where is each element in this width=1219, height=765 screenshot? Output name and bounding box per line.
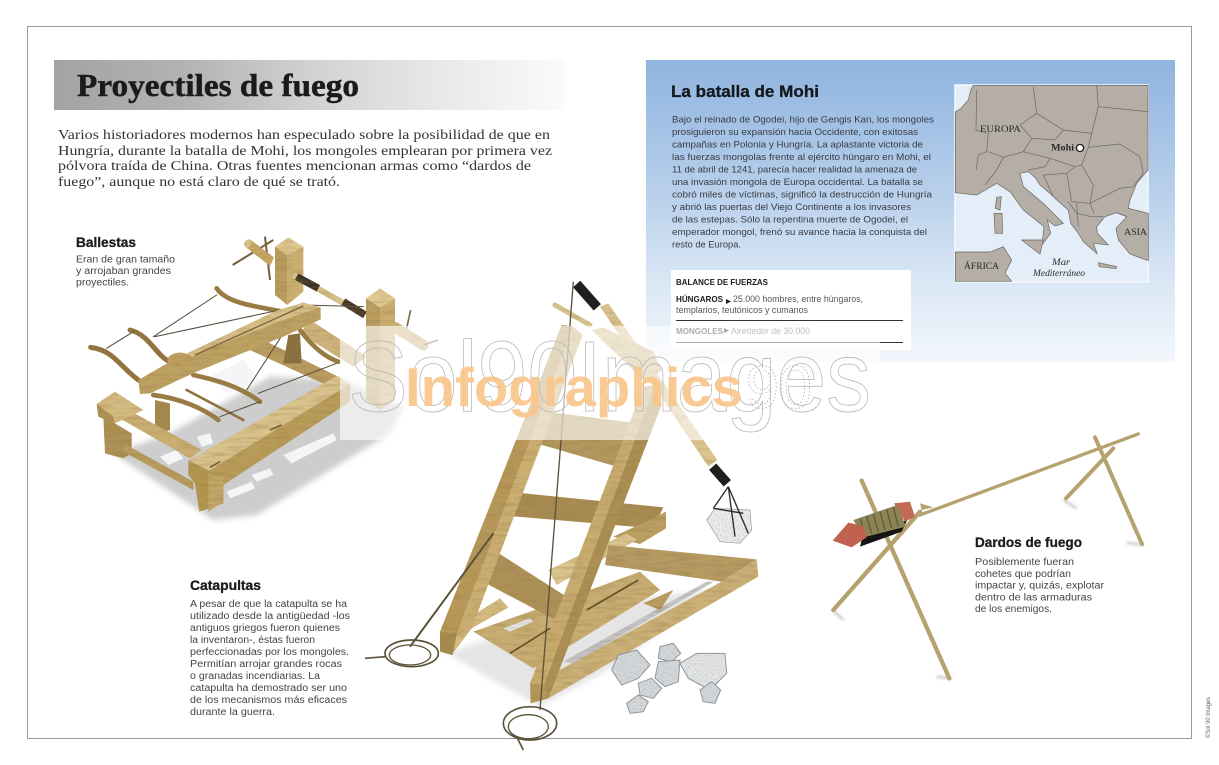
- text: Catapultas: durante la guerra.: [190, 707, 275, 718]
- balance de fuerzas box: MONGOLES: [676, 326, 723, 336]
- windlass axle: [293, 275, 365, 315]
- lower crossbeam: [477, 547, 572, 623]
- label: Mohi marker: Mohi: [1051, 144, 1074, 154]
- right base beam: [535, 545, 758, 698]
- ballista stock: [138, 303, 321, 394]
- right leg: [530, 385, 662, 703]
- platform slats: [473, 572, 673, 668]
- heading: Catapultas: Catapultas: [190, 577, 261, 593]
- label: Mohi marker: [1051, 144, 1084, 154]
- left leg: [440, 325, 583, 655]
- credit: ©Sol 90 Images: [1204, 696, 1212, 738]
- illustration: catapult: [365, 282, 758, 750]
- far beam: [510, 493, 666, 585]
- balance de fuerzas box: HÚNGAROS: [676, 293, 723, 304]
- top board: [537, 412, 637, 467]
- panel body text: las fuerzas mongolas frente al ejército húngaro en Mohi, el: [672, 151, 931, 162]
- text: Ballestas: proyectiles.: [76, 278, 129, 288]
- sling with stone: [707, 487, 752, 543]
- rear pin: [555, 305, 590, 325]
- title band: [54, 60, 565, 110]
- arm bindings: [577, 284, 727, 483]
- panel body text: cobró miles de víctimas, significó la destrucción de Hungría: [672, 188, 933, 200]
- intro text: pólvora traída de China. Otras fuentes mencionan armas como “dardos de: [58, 158, 531, 173]
- throwing arm: [592, 303, 717, 467]
- second roller: [395, 327, 423, 345]
- text: Catapultas: la inventaron-, éstas fueron: [190, 635, 315, 646]
- rear post: [275, 237, 303, 305]
- text: Ballestas: Eran de gran tamaño: [76, 254, 175, 266]
- windlass roller: [233, 237, 274, 280]
- rocket: [833, 502, 933, 547]
- heading: Ballestas: Ballestas: [76, 234, 136, 250]
- watermark: Infographics: [405, 356, 743, 418]
- text: Catapultas: [190, 599, 350, 718]
- text: Dardos de fuego: de los enemigos.: [975, 604, 1052, 615]
- panel body text: y abrió las puertas del Viejo Continente a los invasores: [672, 201, 911, 212]
- text: Dardos de fuego: Posiblemente fueran: [975, 557, 1074, 568]
- panel body text: [672, 114, 934, 250]
- base frame: [97, 376, 350, 512]
- panel body text: una invasión mongola de Europa occidental. La batalla se: [672, 176, 923, 187]
- intro text: Varios historiadores modernos han especulado sobre la posibilidad de que en: [58, 127, 550, 142]
- balance de fuerzas box: templarios, teutónicos y cumanos: [676, 305, 809, 315]
- ropes and coils: [365, 282, 573, 750]
- panel body text: campañas en Polonia y Hungría. La aplastante victoria de: [672, 138, 923, 150]
- label: Europa: EUROPA: [980, 125, 1021, 135]
- panel body text: resto de Europa.: [672, 238, 741, 250]
- panel body text: prosiguieron su expansión hacia Occidente, con exitosas: [672, 126, 918, 137]
- label: Mar Mediterraneo: Mar: [1051, 258, 1070, 268]
- text: Catapultas: antiguos griegos fueron quienes: [190, 623, 340, 634]
- title: Proyectiles de fuego: [77, 67, 359, 103]
- rear beam: [300, 320, 367, 367]
- intro text: Hungría, durante la batalla de Mohi, los mongoles emplearan por primera vez: [58, 143, 552, 158]
- label: Mar Mediterraneo: Mediterráneo: [1032, 269, 1085, 279]
- panel body text: 11 de abril de 1241, parecía hacer realidad la amenaza de: [672, 164, 917, 174]
- illustration: ballista: [91, 237, 438, 520]
- balance de fuerzas box: 25.000 hombres, entre húngaros,: [733, 294, 863, 304]
- label: Mar Mediterraneo: [1032, 258, 1085, 279]
- balance de fuerzas box: [671, 270, 911, 350]
- front post: [366, 288, 395, 410]
- bows and strings: [91, 288, 363, 420]
- text: Dardos de fuego: cohetes que podrían: [975, 569, 1071, 580]
- text: Dardos de fuego: impactar y, quizás, explotar: [975, 580, 1105, 592]
- text: Catapultas: utilizado desde la antigüedad -los: [190, 611, 350, 622]
- balance de fuerzas box: BALANCE DE FUERZAS: [676, 277, 768, 287]
- watermark: Sol90Images: [348, 321, 871, 433]
- intro text: fuego”, aunque no está claro de qué se trató.: [58, 174, 340, 189]
- map of central Europe: [955, 85, 1148, 282]
- watermark: 90: [746, 354, 812, 421]
- text: Catapultas: o granadas incendiarias. La: [190, 671, 320, 682]
- text: Catapultas: de los mecanismos más eficaces: [190, 695, 347, 706]
- text: Ballestas: [76, 254, 175, 288]
- heading: Dardos de fuego: Dardos de fuego: [975, 534, 1082, 550]
- text: Catapultas: catapulta ha demostrado ser uno: [190, 683, 347, 694]
- panel body text: emperador mongol, frenó su avance hacia la conquista del: [672, 226, 927, 237]
- text: Catapultas: perfeccionadas por los mongoles.: [190, 647, 349, 658]
- pile of rocks: [612, 643, 727, 713]
- text: Ballestas: y arrojaban grandes: [76, 266, 171, 277]
- text: Dardos de fuego: [975, 557, 1105, 615]
- panel: La batalla de Mohi: [646, 60, 1175, 362]
- panel body text: Bajo el reinado de Ogodei, hijo de Gengis Kan, los mongoles: [672, 114, 934, 124]
- intro text: [58, 127, 552, 189]
- text: Catapultas: A pesar de que la catapulta se ha: [190, 599, 347, 610]
- illustration: fire dart launcher: [833, 434, 1143, 678]
- label: Asia: ASIA: [1124, 228, 1147, 238]
- text: Dardos de fuego: dentro de las armaduras: [975, 592, 1092, 604]
- panel heading: La batalla de Mohi: [671, 82, 819, 101]
- panel body text: de las estepas. Sólo la repentina muerte de Ogodei, el: [672, 214, 908, 224]
- left base beam: [440, 598, 508, 655]
- balance de fuerzas box: Alrededor de 30.000: [731, 326, 810, 336]
- label: Africa: ÁFRICA: [964, 260, 999, 272]
- text: Catapultas: Permitían arrojar grandes rocas: [190, 659, 342, 670]
